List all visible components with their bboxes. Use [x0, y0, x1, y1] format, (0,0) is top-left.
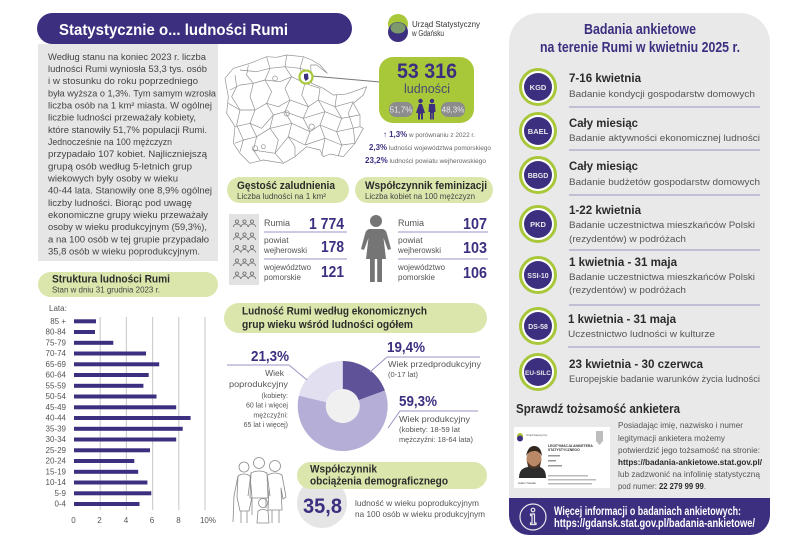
- table: feminisation values: pomorskie: [398, 272, 435, 282]
- heading: economic age groups: Ludność Rumi według ekonomicznych: [242, 306, 427, 318]
- heading: demographic dependency ratio: Współczynnik: [310, 464, 378, 476]
- bar chart: population by age group: 80-84: [46, 328, 67, 337]
- table: feminisation values: 103: [463, 240, 487, 257]
- heading: economic age groups: grup wieku wśród ludności ogółem: [242, 319, 413, 331]
- survey: KGD: [520, 70, 760, 107]
- panel: introductory text: liczby ludności. Biorąc pod uwagę: [48, 198, 192, 208]
- interviewer ID card: LEGITYMACJA ANKIETERA: [548, 444, 593, 448]
- panel: introductory text: osoby w wieku produkcyjnym (59,3%),: [48, 222, 207, 232]
- panel: introductory text: Według stanu na koniec 2023 r. liczba: [48, 52, 206, 62]
- donut chart: economic age groups: [298, 361, 388, 451]
- bar chart: population by age group: 0: [71, 516, 76, 525]
- interviewer ID card: [514, 427, 610, 488]
- panel: surveys in Rumia: [509, 13, 770, 500]
- panel: introductory text: przypadało 107 kobiet. Najliczniejszą: [48, 149, 207, 159]
- heading: surveys: [540, 21, 740, 56]
- panel: introductory text: liczbie ludności przeważały kobiety,: [48, 112, 196, 122]
- table: population density values: województwo: [263, 262, 311, 272]
- survey: KGD: Badanie kondycji gospodarstw domowych: [569, 89, 755, 99]
- table: feminisation values: wejherowski: [397, 245, 441, 255]
- table: feminisation values: [397, 216, 488, 282]
- heading: population density: [227, 177, 349, 203]
- text: how to verify the interviewer: pod numer: 22 279 99 99.: [618, 481, 706, 491]
- callout: post-working age 21,3%: (kobiety:: [262, 393, 288, 400]
- map: Pomeranian voivodeship with Rumia marked: [225, 55, 380, 163]
- table: population density values: Rumia: [264, 218, 291, 229]
- men share: 48,3%: [442, 106, 464, 114]
- survey: SSI-10: Badanie uczestnictwa mieszkańców Polski: [569, 272, 755, 282]
- survey: PKD: Badanie uczestnictwa mieszkańców Polski: [569, 220, 755, 230]
- panel: introductory text: była wyższa o 1,3%. Tym samym wzrosła: [48, 88, 216, 98]
- callout: working age 59,3%: mężczyźni: 18-64 lata): [399, 437, 473, 444]
- icon: information: [520, 504, 546, 530]
- bar chart: population by age group: 60-64: [46, 371, 67, 380]
- heading: population structure: Struktura ludności Rumi: [52, 274, 170, 286]
- callout: population 53 316: ludności: [404, 81, 450, 96]
- survey: DS-58: Uczestnictwo ludności w kulturze: [568, 329, 715, 339]
- panel: introductory text: 40-44 lata. Stanowiły one 8,9% ogólnej: [48, 186, 212, 196]
- survey: EU-SILC: [520, 354, 760, 390]
- banner: more information: Więcej informacji o badaniach ankietowych:: [554, 506, 741, 518]
- survey: PKD: 1-22 kwietnia: [569, 205, 642, 217]
- text: how to verify the interviewer: potwierdzić jego tożsamość na stronie:: [618, 445, 760, 455]
- panel: introductory text: ludności Rumi wyniosła 53,3 tys. osób: [48, 64, 207, 74]
- survey: EU-SILC: Europejskie badanie warunków życia ludności: [569, 374, 760, 384]
- bar chart: population by age group: 85 +: [50, 317, 66, 326]
- table: feminisation values: województwo: [397, 262, 445, 272]
- survey: BBGD: Cały miesiąc: [569, 161, 639, 173]
- bar chart: population by age group: 8: [176, 516, 181, 525]
- figure: dependency ratio value: ludność w wieku poprodukcyjnym: [355, 498, 479, 508]
- heading: check the interviewer's identity: Sprawdź tożsamość ankietera: [516, 401, 681, 416]
- table: feminisation values: 106: [463, 265, 487, 282]
- bar chart: population by age group: 6: [150, 516, 155, 525]
- callout: post-working age 21,3%: poprodukcyjny: [229, 379, 289, 389]
- icon: family of older people and child: [233, 458, 286, 523]
- survey: EU-SILC: 23 kwietnia - 30 czerwca: [569, 359, 704, 371]
- banner: more information: [509, 498, 770, 535]
- callout: post-working age 21,3%: mężczyźni:: [253, 412, 288, 420]
- heading: demographic dependency ratio: [297, 462, 487, 528]
- panel: introductory text: 35,8 osób w wieku poprodukcyjnym.: [48, 246, 200, 256]
- survey: BBGD: Badanie budżetów gospodarstw domowych: [569, 177, 760, 187]
- heading: feminisation ratio: Współczynnik feminizacji: [365, 180, 487, 192]
- logo: Urząd Statystyczny w Gdańsku: w Gdańsku: [411, 29, 444, 38]
- bar chart: population by age group: 4: [124, 516, 129, 525]
- text: how to verify the interviewer: lub zadzwonić na infolinię statystyczną: [618, 469, 760, 479]
- bar chart: population by age group: 25-29: [46, 446, 67, 455]
- survey: SSI-10: 1 kwietnia - 31 maja: [569, 257, 678, 269]
- callout: population 53 316: [379, 57, 474, 123]
- heading: economic age groups: [224, 303, 487, 333]
- bar chart: population by age group: 2: [97, 516, 102, 525]
- callout: working age 59,3%: Wiek produkcyjny: [399, 414, 471, 424]
- survey: PKD: PKD: [530, 220, 546, 229]
- bar chart: population by age group: 45-49: [46, 403, 67, 412]
- survey: KGD: KGD: [530, 83, 547, 92]
- survey: BAEL: [520, 114, 760, 150]
- callout: working age 59,3%: 59,3%: [399, 393, 437, 410]
- bar chart: population by age group: 10-14: [46, 478, 67, 487]
- figure: dependency ratio value: na 100 osób w wieku produkcyjnym: [355, 509, 485, 519]
- table: population density values: 121: [321, 264, 344, 281]
- bar chart: population by age group: 40-44: [46, 414, 67, 423]
- panel: introductory text: liczba osób na 1 km² miasta. W ogólnej: [48, 100, 212, 110]
- heading: population density: Liczba ludności na 1 km²: [237, 192, 326, 201]
- bar chart: population by age group: [46, 304, 216, 525]
- population comparison figures: [365, 130, 491, 165]
- survey: BBGD: BBGD: [528, 173, 548, 180]
- survey: SSI-10: SSI-10: [527, 273, 549, 280]
- survey: PKD: [520, 205, 760, 250]
- callout: post-working age 21,3%: 60 lat i więcej: [246, 402, 288, 410]
- population comparison figures: 23,2% ludności powiatu wejherowskiego: [365, 156, 486, 165]
- panel: introductory text: a na 100 osób w tej grupie przypadało: [48, 234, 209, 244]
- survey: PKD: (rezydentów) w podróżach: [569, 234, 686, 244]
- text: how to verify the interviewer: Posiadając imię, nazwisko i numer: [618, 420, 743, 430]
- survey: SSI-10: (rezydentów) w podróżach: [569, 285, 686, 295]
- panel: introductory text: ekonomiczne grupy wieku przeważały: [48, 210, 209, 220]
- bar chart: population by age group: 30-34: [46, 435, 67, 444]
- callout: post-working age 21,3%: 21,3%: [251, 348, 289, 365]
- table: population density values: wejherowski: [263, 245, 307, 255]
- banner: more information: https://gdansk.stat.gov.pl/badania-ankietowe/: [554, 518, 756, 530]
- text: how to verify the interviewer: legitymacji ankietera możemy: [618, 433, 726, 443]
- icon: woman and man: [416, 99, 436, 120]
- table: population density values: 178: [321, 239, 344, 256]
- bar chart: population by age group: 50-54: [46, 392, 67, 401]
- panel: introductory text: które stanowiły 51,7% populacji Rumi.: [48, 125, 207, 135]
- table: population density values: powiat: [264, 235, 289, 245]
- interviewer ID card: Urząd Statystyczny: [526, 434, 548, 437]
- figure: dependency ratio value: [303, 495, 485, 519]
- table: feminisation values: Rumia: [398, 218, 425, 229]
- callout: post-working age 21,3%: Wiek: [265, 368, 285, 378]
- interviewer ID card: STATYSTYCZNEGO: [548, 448, 580, 452]
- bar chart: population by age group: 15-19: [46, 468, 67, 476]
- table: population density values: pomorskie: [264, 272, 301, 282]
- bar chart: population by age group: 55-59: [46, 382, 67, 390]
- bar chart: population by age group: 70-74: [46, 349, 67, 358]
- survey: BAEL: Badanie aktywności ekonomicznej ludności: [569, 133, 760, 143]
- panel: introductory text: i w stosunku do roku poprzedniego: [48, 76, 198, 86]
- bar chart: population by age group: 75-79: [46, 338, 67, 348]
- callout: working age 59,3%: [388, 393, 478, 444]
- panel: introductory text: grupą osób według 5-letnich grup: [48, 162, 192, 172]
- title banner: [37, 13, 352, 44]
- callout: pre-working age 19,4%: (0-17 lat): [388, 372, 418, 379]
- callout: population 53 316: 53 316: [397, 60, 457, 83]
- heading: surveys: na terenie Rumi w kwietniu 2025 r.: [540, 39, 740, 56]
- survey: DS-58: [520, 308, 760, 347]
- callout: post-working age 21,3%: [227, 348, 307, 429]
- callout: working age 59,3%: (kobiety: 18-59 lat: [399, 427, 460, 434]
- survey: KGD: 7-16 kwietnia: [569, 73, 642, 85]
- callout: pre-working age 19,4%: Wiek przedprodukcyjny: [388, 359, 482, 369]
- heading: population structure: Stan w dniu 31 grudnia 2023 r.: [52, 286, 160, 294]
- population comparison figures: ↑ 1,3% w porównaniu z 2022 r.: [383, 130, 475, 139]
- figure: dependency ratio value: 35,8: [303, 495, 342, 518]
- table: population density values: [263, 216, 347, 282]
- panel: introductory text: wiekowych były osoby w wieku: [47, 174, 178, 184]
- women share: 51,7%: [390, 106, 412, 114]
- callout: pre-working age 19,4%: [370, 339, 482, 379]
- title banner: Statystycznie o... ludności Rumi: [59, 22, 288, 39]
- interviewer ID card: Adam Nowak: [518, 481, 536, 485]
- bar chart: population by age group: Lata:: [49, 304, 67, 313]
- bar chart: population by age group: 10%: [200, 516, 216, 525]
- bar chart: population by age group: 65-69: [46, 360, 67, 369]
- bar chart: population by age group: 35-39: [46, 424, 67, 434]
- callout: pre-working age 19,4%: 19,4%: [387, 339, 425, 356]
- panel: introductory text: Jednocześnie na 100 mężczyzn: [48, 137, 172, 147]
- bar chart: population by age group: 0-4: [54, 500, 67, 509]
- bar chart: population by age group: 20-24: [46, 457, 67, 466]
- heading: population structure: [38, 272, 218, 297]
- text: how to verify the interviewer: [618, 420, 763, 491]
- survey: DS-58: DS-58: [528, 324, 548, 331]
- survey: BAEL: Cały miesiąc: [569, 118, 639, 130]
- heading: demographic dependency ratio: obciążenia demograficznego: [310, 476, 448, 488]
- table: feminisation values: powiat: [398, 235, 423, 245]
- logo: Urząd Statystyczny w Gdańsku: Urząd Statystyczny: [412, 20, 480, 29]
- callout: post-working age 21,3%: 65 lat i więcej): [244, 422, 288, 429]
- survey: DS-58: 1 kwietnia - 31 maja: [568, 314, 677, 326]
- heading: surveys: Badania ankietowe: [584, 21, 696, 38]
- heading: population density: Gęstość zaludnienia: [237, 180, 336, 192]
- survey: EU-SILC: EU-SILC: [525, 370, 551, 377]
- interviewer photo: [519, 446, 546, 478]
- heading: feminisation ratio: [355, 177, 493, 203]
- survey: BBGD: [520, 158, 760, 195]
- table: feminisation values: 107: [463, 216, 487, 233]
- icon: crowd of people: [229, 214, 259, 285]
- table: population density values: 1 774: [309, 216, 344, 233]
- survey: SSI-10: [520, 257, 760, 305]
- panel: introductory text: [38, 44, 218, 261]
- survey: BAEL: BAEL: [528, 127, 549, 136]
- logo: Urząd Statystyczny w Gdańsku: [388, 14, 480, 42]
- icon: woman silhouette: [361, 215, 391, 282]
- bar chart: population by age group: 5-9: [54, 489, 67, 498]
- heading: feminisation ratio: Liczba kobiet na 100 mężczyzn: [365, 192, 475, 201]
- population comparison figures: 2,3% ludności województwa pomorskiego: [369, 143, 491, 152]
- text: how to verify the interviewer: https://badania-ankietowe.stat.gov.pl/: [618, 457, 763, 467]
